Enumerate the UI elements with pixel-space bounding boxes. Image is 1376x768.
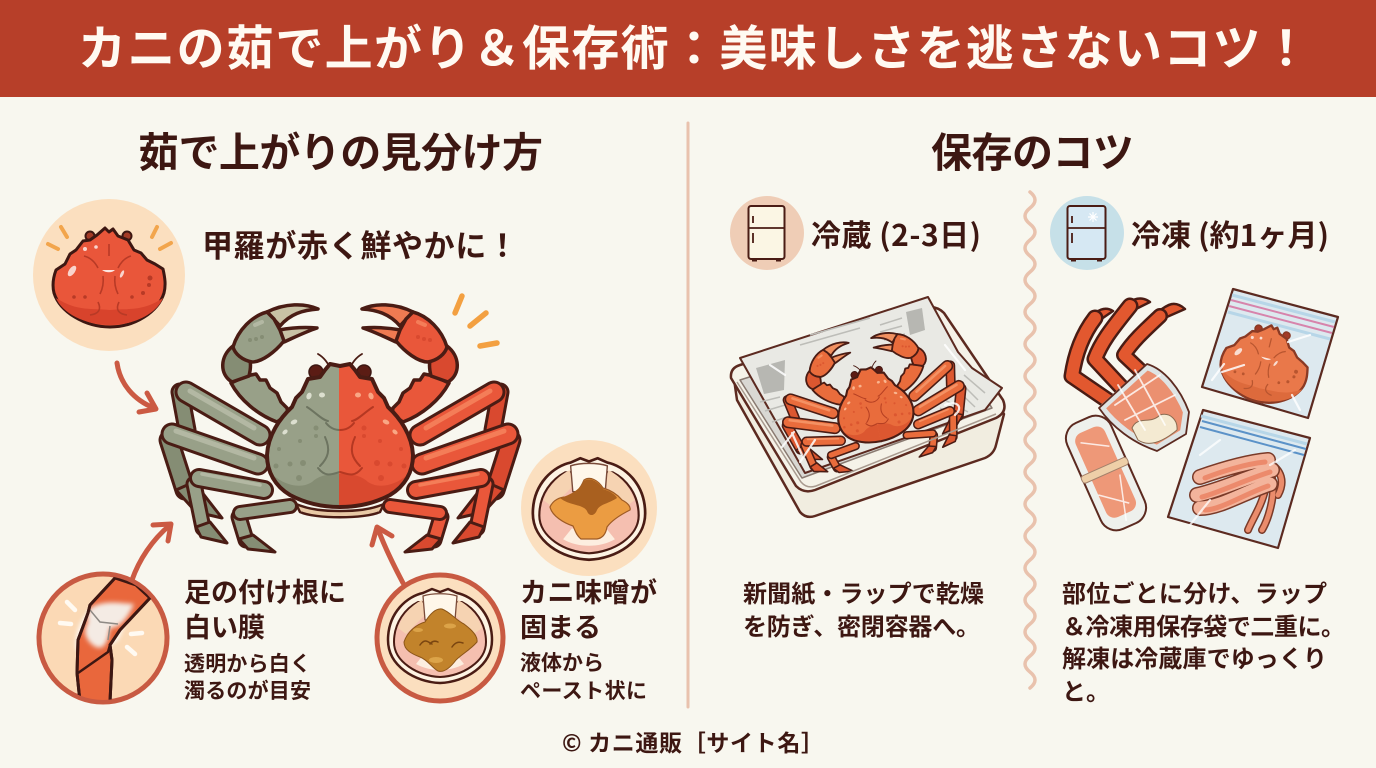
- illustration: half raw half cooked crab: [169, 305, 511, 552]
- text block: 足の付け根: 透明から白く: [184, 648, 311, 678]
- icon: leg joint white membrane circle: [39, 574, 167, 702]
- icon: freezer: [1050, 196, 1124, 270]
- icon: emphasis sparks: [455, 296, 497, 346]
- icon: bright red carapace circle: [33, 199, 185, 351]
- heading: 見分け方: 茹で上がりの見分け方: [138, 119, 543, 179]
- text block: 冷蔵 tips: を防ぎ、密閉容器へ。: [743, 607, 980, 642]
- arrow: leg joint to crab: [132, 524, 171, 580]
- illustration: freezer bag with crab legs: [1168, 410, 1310, 548]
- illustration: wrapped leg piece: [1060, 410, 1152, 536]
- text block: 足の付け根: 濁るのが目安: [184, 675, 311, 705]
- text block: カニ味噌: 液体から: [520, 647, 604, 677]
- label: 甲羅: 甲羅が赤く鮮やかに！: [202, 221, 518, 266]
- footer credit: © カニ通販［サイト名］: [562, 724, 824, 758]
- divider: wavy: [1025, 192, 1035, 688]
- text block: 足の付け根: 足の付け根に: [184, 571, 346, 610]
- arrow: carapace to crab: [117, 363, 156, 412]
- illustration: freezer bag with carapace: [1202, 289, 1338, 418]
- arrow: miso to crab: [372, 527, 403, 583]
- panel: 茹で上がりの見分け方: [33, 119, 657, 705]
- label: 冷凍: 冷凍 (約1ヶ月): [1131, 211, 1329, 255]
- text block: 冷凍 tips: [1062, 574, 1345, 707]
- text block: カニ味噌: 固まる: [520, 606, 601, 645]
- text block: 冷凍 tips: と。: [1062, 672, 1110, 707]
- icon: refrigerator: [730, 196, 804, 270]
- text block: カニ味噌: [520, 571, 657, 705]
- illustration: crab in tray: [731, 297, 1004, 517]
- text block: 冷凍 tips: 解凍は冷蔵庫でゆっくり: [1062, 639, 1327, 674]
- text block: カニ味噌: カニ味噌が: [520, 571, 657, 610]
- illustration: wrapped crab legs: [1072, 299, 1189, 451]
- divider: panels: [686, 123, 690, 707]
- text block: カニ味噌: ペースト状に: [520, 675, 647, 705]
- panel: 保存のコツ: [730, 119, 1345, 707]
- heading: 保存のコツ: 保存のコツ: [931, 119, 1134, 179]
- text block: 冷凍 tips: ＆冷凍用保存袋で二重に。: [1062, 607, 1345, 642]
- title banner: [0, 0, 1376, 97]
- icon: liquid miso in shell circle: [521, 440, 657, 576]
- text block: 足の付け根: 白い膜: [184, 606, 265, 645]
- text block: 冷蔵 tips: [743, 574, 984, 642]
- text block: 足の付け根: [184, 571, 346, 705]
- title banner: カニの茹で上がり＆保存術：美味しさを逃さないコツ！: [78, 9, 1310, 79]
- text block: 冷凍 tips: 部位ごとに分け、ラップ: [1062, 574, 1327, 609]
- icon: solid miso in shell circle: [377, 575, 503, 701]
- text block: 冷蔵 tips: 新聞紙・ラップで乾燥: [743, 574, 984, 609]
- label: 冷蔵: 冷蔵 (2-3日): [811, 211, 981, 255]
- newspaper: [740, 297, 1002, 473]
